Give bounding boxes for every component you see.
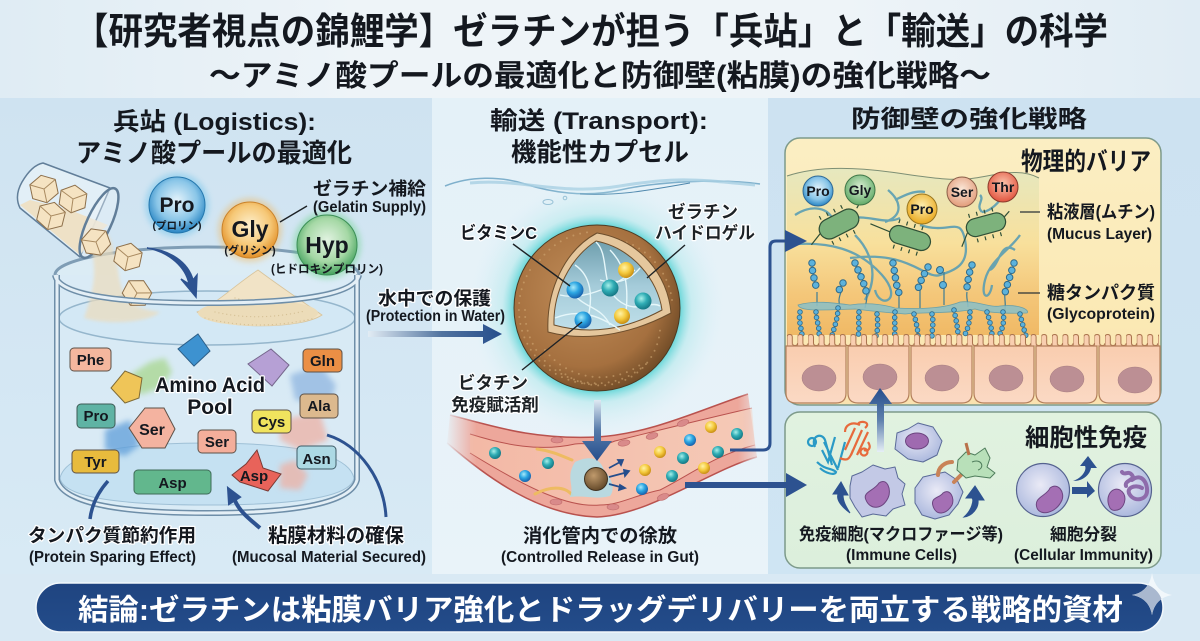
arrow: macrophage right <box>964 486 984 517</box>
bacteria <box>801 197 1015 258</box>
epithelial cells <box>786 346 1160 403</box>
label: mucus layer <box>1020 202 1155 243</box>
beaker back <box>55 247 359 512</box>
panel: physical barrier <box>785 138 1161 405</box>
label: cell division: 細胞分裂 <box>1050 525 1118 544</box>
sphere: Pro: Pro <box>159 194 195 217</box>
label: mucosal material secured <box>232 525 426 566</box>
sphere: Pro <box>803 176 833 206</box>
label: gelatin supply <box>280 178 426 222</box>
label: controlled release: (Controlled Release in Gut) <box>501 549 699 566</box>
blurred smudges <box>105 358 336 490</box>
label: gelatin hydrogel: ハイドロゲル <box>655 223 755 243</box>
amino acid pool <box>70 334 342 494</box>
label: gelatin hydrogel <box>647 202 755 278</box>
sphere: Pro yellow: Pro <box>910 201 934 217</box>
heading: transport: 輸送 (Transport): <box>490 107 708 135</box>
sphere: Gly <box>845 175 875 205</box>
icon: macrophage spiky <box>850 465 905 517</box>
heading: transport <box>490 107 708 167</box>
chip: Tyr: Tyr <box>84 454 107 471</box>
arrow: powder into pool <box>147 248 197 297</box>
mucin strands <box>785 190 1020 301</box>
panel: transport <box>366 107 760 566</box>
arrow: capsule to gut <box>582 400 612 461</box>
sphere: Gly <box>218 198 282 262</box>
heading: logistics <box>76 108 352 168</box>
sphere: Hyp: (ヒドロキシプロリン) <box>271 262 383 276</box>
heading: logistics: 兵站 (Logistics): <box>113 108 316 136</box>
label: gelatin hydrogel: ゼラチン <box>668 202 738 222</box>
sphere: Thr: Thr <box>992 179 1015 195</box>
panel: defense <box>785 106 1161 568</box>
label: cell division: (Cellular Immunity) <box>1014 547 1153 564</box>
microvilli <box>787 334 1159 346</box>
label: amino acid pool: Amino Acid <box>155 374 265 397</box>
icon: powder stream <box>84 232 160 322</box>
label: protection in water: (Protection in Water) <box>366 308 505 325</box>
chip: Phe: Phe <box>77 352 104 369</box>
chip: Ser: Ser <box>205 434 229 451</box>
chip: Ser <box>198 430 236 453</box>
icon: glow <box>469 180 725 436</box>
chip: Phe <box>70 348 111 371</box>
heading: defense: 防御壁の強化戦略 <box>851 106 1087 133</box>
yellow strands <box>535 449 572 495</box>
label: glycoprotein <box>1018 283 1155 323</box>
beaker rim front <box>55 275 359 513</box>
label: vitachin immune activator <box>451 322 582 415</box>
arrow: protein sparing <box>90 481 108 519</box>
sphere: Ser <box>947 177 977 207</box>
chip: Asn <box>297 446 336 469</box>
icon: sparkle <box>1132 573 1172 615</box>
label: vitamin C <box>460 223 570 286</box>
label: glycoprotein: (Glycoprotein) <box>1047 306 1155 323</box>
arrow: division up <box>1073 456 1097 481</box>
chip: Pro: Pro <box>83 408 109 425</box>
label: gelatin supply: (Gelatin Supply) <box>313 199 426 216</box>
heading: logistics: アミノ酸プールの最適化 <box>76 138 352 168</box>
chip: Asp red <box>232 450 281 491</box>
sphere: Gly: Gly <box>231 216 269 242</box>
icon: up arrow into epithelium <box>869 388 892 452</box>
sphere: Gly: (グリシン) <box>224 243 276 257</box>
icon: capsule <box>514 225 680 391</box>
chip: Tyr <box>72 450 119 473</box>
label: amino acid pool <box>155 374 265 419</box>
chip: Gln: Gln <box>310 353 335 370</box>
label: protein sparing effect <box>28 525 196 566</box>
sphere: Hyp: Hyp <box>305 232 349 258</box>
sphere: Pro: Pro <box>806 183 830 199</box>
panel: cellular immunity <box>785 388 1161 568</box>
label: mucus layer: 粘液層(ムチン) <box>1047 202 1155 222</box>
label: controlled release <box>501 524 699 566</box>
icon: green pathogen <box>957 443 995 478</box>
subtitle: 〜アミノ酸プールの最適化と防御壁(粘膜)の強化戦略〜 <box>209 60 991 93</box>
mucus layer <box>787 168 1039 335</box>
label: vitachin immune activator: ビタチン <box>458 373 528 393</box>
sphere: Pro yellow <box>907 194 937 224</box>
label: mucosal material secured: 粘膜材料の確保 <box>268 525 404 547</box>
arrow: into capsule <box>368 324 502 344</box>
glycan beads upper <box>812 263 1014 293</box>
chip: Asn: Asn <box>302 451 331 468</box>
label: gelatin supply: ゼラチン補給 <box>313 178 426 199</box>
chip: Cys <box>252 410 291 433</box>
label: controlled release: 消化管内での徐放 <box>523 524 677 547</box>
sphere: Pro <box>145 173 209 237</box>
label: protection in water <box>366 288 505 325</box>
chip: Pro <box>77 404 115 428</box>
arrow: gut to immune cells <box>685 473 807 497</box>
icon: macrophage top <box>895 423 942 462</box>
chip: Ser hexagon <box>129 408 175 448</box>
label: protection in water: 水中での保護 <box>378 288 491 309</box>
icon: cell dividing <box>1016 464 1070 516</box>
icon: red protein <box>840 422 870 460</box>
arrow: mucosal curve <box>327 435 386 517</box>
icon: tilted cup with gelatin cubes <box>17 163 155 311</box>
balls <box>566 282 584 298</box>
label: mucus layer: (Mucus Layer) <box>1047 226 1152 243</box>
chip: Asp green: Asp <box>158 475 187 492</box>
label: vitachin immune activator: 免疫賦活剤 <box>451 395 539 415</box>
chip: Gln <box>303 349 342 372</box>
sphere: Ser: Ser <box>951 184 974 200</box>
glycan chain stems <box>817 272 1005 310</box>
sphere: Pro: (プロリン) <box>152 220 202 232</box>
arrow: division right <box>1072 481 1095 498</box>
label: amino acid pool: Pool <box>187 396 233 419</box>
chip: Cys: Cys <box>258 414 285 431</box>
heading: physical barrier: 物理的バリア <box>1021 148 1151 176</box>
chip: Ala: Ala <box>307 398 331 415</box>
released nutrient balls <box>489 421 743 495</box>
glycan beads lower <box>799 308 1026 338</box>
chip: Asp red: Asp <box>240 468 268 485</box>
chip: Ser hexagon: Ser <box>139 422 165 439</box>
label: protein sparing effect: (Protein Sparing Effect) <box>29 549 196 566</box>
chip: pentagon <box>111 371 142 403</box>
heading: cellular immunity: 細胞性免疫 <box>1025 424 1147 452</box>
chip: Asp green <box>134 470 211 494</box>
arrow: mucosal material <box>228 488 260 528</box>
chip: blue diamond <box>178 334 210 366</box>
chip: purple diamond <box>248 349 289 386</box>
icon: blue protein <box>808 436 845 474</box>
gut illustration <box>447 394 757 517</box>
icon: dividing cell <box>1098 464 1152 516</box>
membrane <box>798 302 1028 314</box>
water surface <box>445 178 760 204</box>
label: glycoprotein: 糖タンパク質 <box>1047 283 1155 303</box>
title: 【研究者視点の錦鯉学】ゼラチンが担う「兵站」と「輸送」の科学 <box>74 11 1108 52</box>
label: immune cells: 免疫細胞(マクロファージ等) <box>799 524 1003 544</box>
label: vitamin C: ビタミンC <box>460 223 537 243</box>
label: cell division <box>1014 525 1153 564</box>
label: protein sparing effect: タンパク質節約作用 <box>28 525 196 546</box>
panel: logistics <box>17 108 426 566</box>
chip: Ala <box>300 394 338 418</box>
label: mucosal material secured: (Mucosal Material Secured) <box>232 549 426 566</box>
icon: powder pile <box>197 270 322 326</box>
conclusion banner: 結論:ゼラチンは粘膜バリア強化とドラッグデリバリーを両立する戦略的資材 <box>78 593 1123 627</box>
released fluid <box>570 458 613 498</box>
sphere: Gly: Gly <box>849 182 871 198</box>
label: immune cells: (Immune Cells) <box>846 547 957 564</box>
conclusion banner <box>36 573 1172 632</box>
sphere: Thr <box>988 172 1018 202</box>
sphere: Hyp <box>271 211 383 279</box>
label: immune cells <box>799 524 1003 564</box>
cell nuclei <box>802 364 1152 393</box>
icon: macrophage engulfing <box>915 462 965 519</box>
arrow: macrophage left <box>833 482 850 513</box>
heading: transport: 機能性カプセル <box>511 139 689 167</box>
arrow: gut to mucus layer <box>730 230 807 450</box>
